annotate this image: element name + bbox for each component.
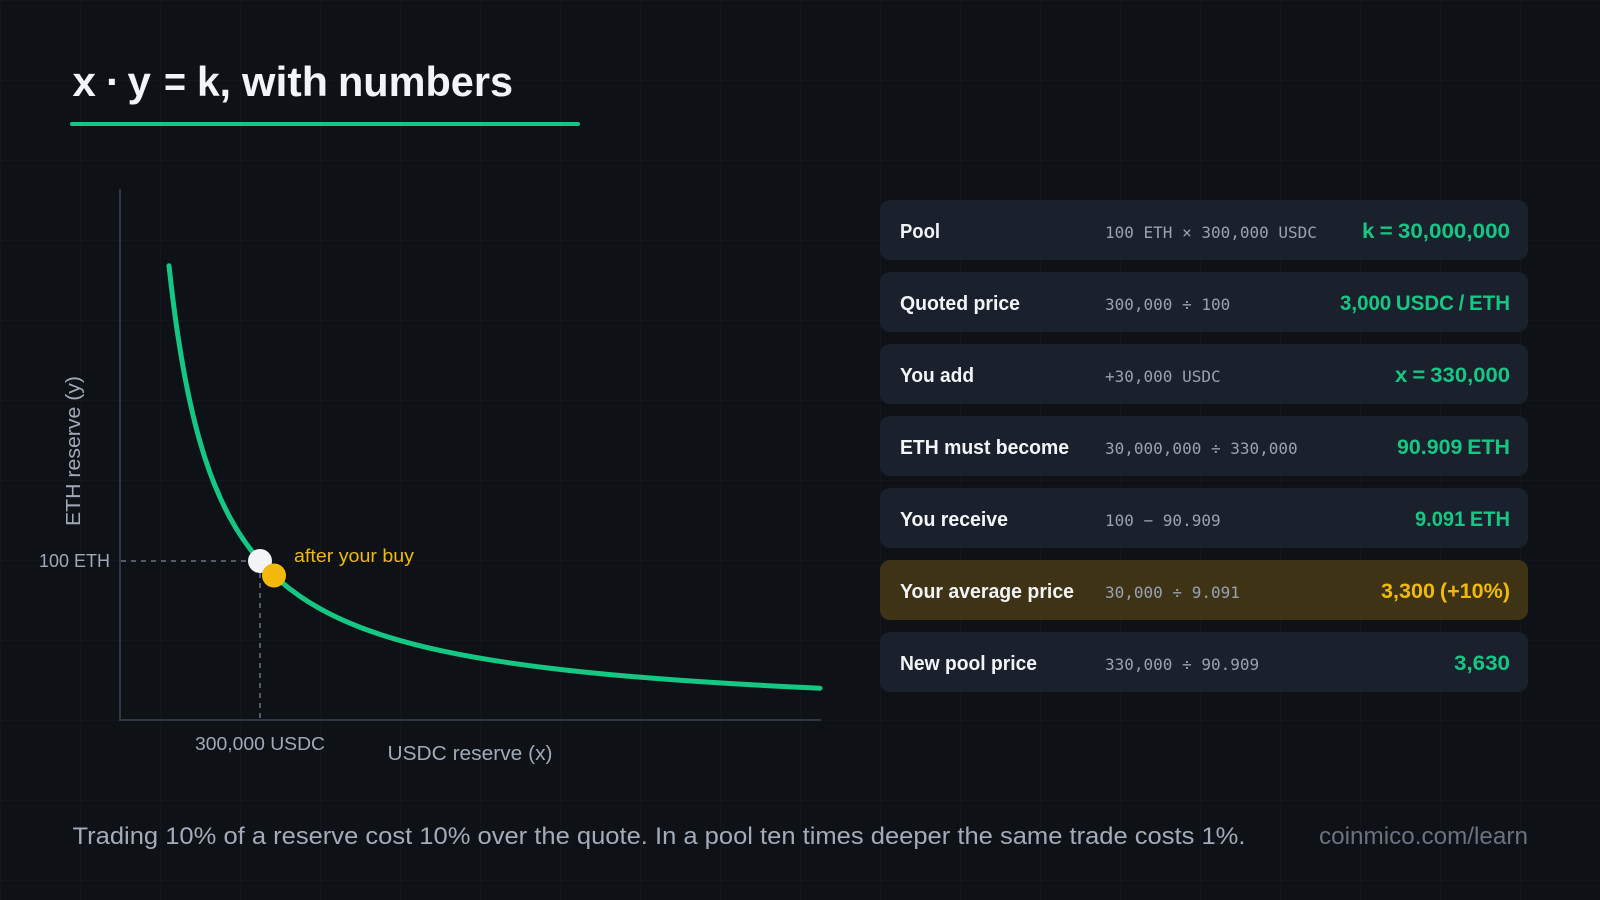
- label: 300,000 USDC: 300,000 USDC: [195, 734, 325, 754]
- row: new pool price: 3,630: [1454, 652, 1510, 675]
- row: new pool price: 330,000 ÷ 90.909: [1105, 655, 1259, 674]
- footer takeaway: Trading 10% of a reserve cost 10% over the quote. In a pool ten times deeper the same trade costs 1%.: [72, 823, 1246, 850]
- row: pool: 100 ETH × 300,000 USDC: [1105, 223, 1317, 242]
- row: new pool price: [880, 632, 1528, 692]
- row: you add: You add: [900, 365, 974, 387]
- chart: constant product curve: [39, 189, 821, 765]
- row: you receive: 100 − 90.909: [1105, 511, 1221, 530]
- row: eth must become: [880, 416, 1528, 476]
- row: pool: Pool: [900, 221, 940, 243]
- chart axes: [120, 189, 821, 720]
- row: your average price (highlighted): 30,000 ÷ 9.091: [1105, 583, 1240, 602]
- row: quoted price: 300,000 ÷ 100: [1105, 295, 1230, 314]
- marker: after your buy: [262, 564, 286, 588]
- title: with: [241, 58, 328, 105]
- row: you add: x = 330,000: [1395, 364, 1510, 387]
- row: quoted price: Quoted price: [900, 293, 1020, 315]
- row: eth must become: ETH must become: [900, 437, 1069, 459]
- x axis title: USDC reserve (x): [388, 743, 552, 765]
- calculation table: [880, 200, 1528, 692]
- row: your average price (highlighted): [880, 560, 1528, 620]
- row: your average price (highlighted): Your average price: [900, 581, 1074, 603]
- row: new pool price: New pool price: [900, 653, 1037, 675]
- label: after your buy: after your buy: [294, 546, 414, 566]
- title: =: [164, 58, 186, 105]
- title: ·: [106, 58, 120, 105]
- row: quoted price: [880, 272, 1528, 332]
- row: pool: [880, 200, 1528, 260]
- label: 100 ETH: 100 ETH: [39, 551, 110, 571]
- row: you add: +30,000 USDC: [1105, 367, 1221, 386]
- y axis title: ETH reserve (y): [63, 376, 85, 526]
- row: you add: [880, 344, 1528, 404]
- footer source: coinmico.com/learn: [1319, 823, 1528, 850]
- title: numbers: [338, 58, 513, 105]
- marker: start point: [248, 549, 272, 573]
- curve: [169, 266, 820, 688]
- title underline: [70, 122, 580, 126]
- row: you receive: [880, 488, 1528, 548]
- row: you receive: You receive: [900, 509, 1008, 531]
- row: eth must become: 30,000,000 ÷ 330,000: [1105, 439, 1298, 458]
- row: pool: k = 30,000,000: [1362, 220, 1510, 243]
- title: x: [72, 58, 96, 105]
- row: quoted price: 3,000 USDC / ETH: [1340, 292, 1510, 315]
- row: your average price (highlighted): 3,300 (+10%): [1381, 580, 1510, 603]
- title: y: [128, 58, 152, 105]
- row: eth must become: 90.909 ETH: [1397, 436, 1510, 459]
- title: k,: [197, 58, 231, 105]
- guide lines to the starting point: [121, 561, 260, 718]
- row: you receive: 9.091 ETH: [1415, 508, 1510, 531]
